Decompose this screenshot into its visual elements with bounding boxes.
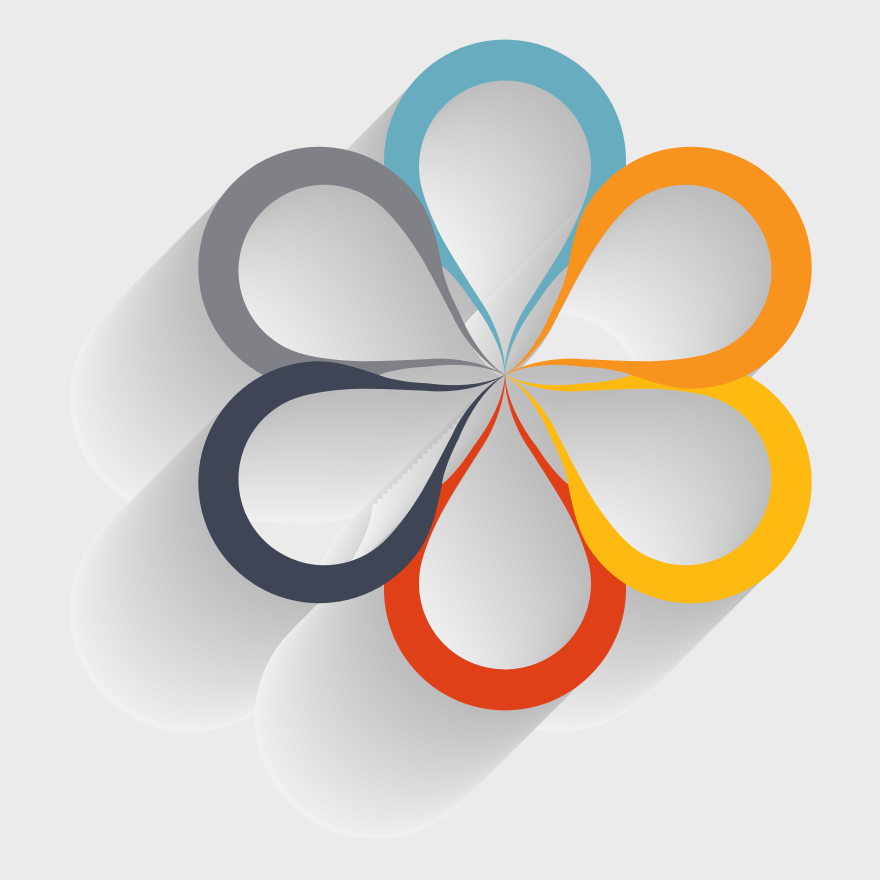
petal: gray (154, 102, 566, 480)
shadow: yellow petal (315, 277, 846, 773)
shadow: teal petal (257, 49, 618, 506)
shadow: dark petal (29, 277, 560, 773)
petal: red (384, 374, 626, 710)
petal: teal (384, 40, 626, 376)
petal: dark slate (154, 270, 566, 648)
shadow: red petal (257, 379, 618, 836)
petal: orange (444, 102, 856, 480)
shadow: orange petal (315, 112, 846, 608)
shadow: gray petal (29, 112, 560, 608)
petal: yellow (444, 270, 856, 648)
